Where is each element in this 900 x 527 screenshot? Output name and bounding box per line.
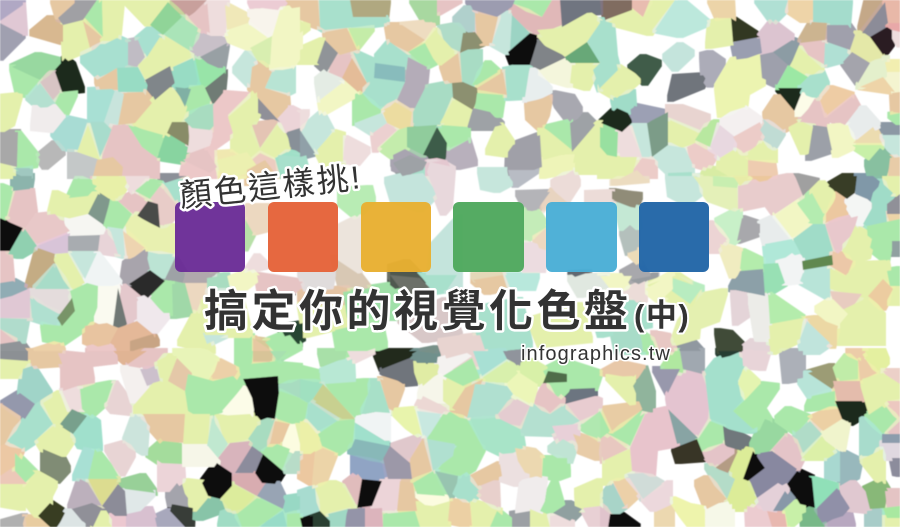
swatch: yellow — [361, 202, 431, 272]
swatch: sky blue — [546, 202, 617, 272]
colour swatches row — [175, 202, 709, 272]
swatch: green — [453, 202, 524, 272]
site url: infographics.tw — [521, 343, 671, 365]
swatch: dark blue — [639, 202, 709, 272]
title suffix: (中) — [634, 298, 690, 333]
swatch: purple — [175, 202, 245, 272]
tilted heading: 顏色這樣挑! — [178, 159, 364, 214]
main title: 搞定你的視覺化色盤 — [204, 287, 632, 336]
swatch: orange — [268, 202, 338, 272]
